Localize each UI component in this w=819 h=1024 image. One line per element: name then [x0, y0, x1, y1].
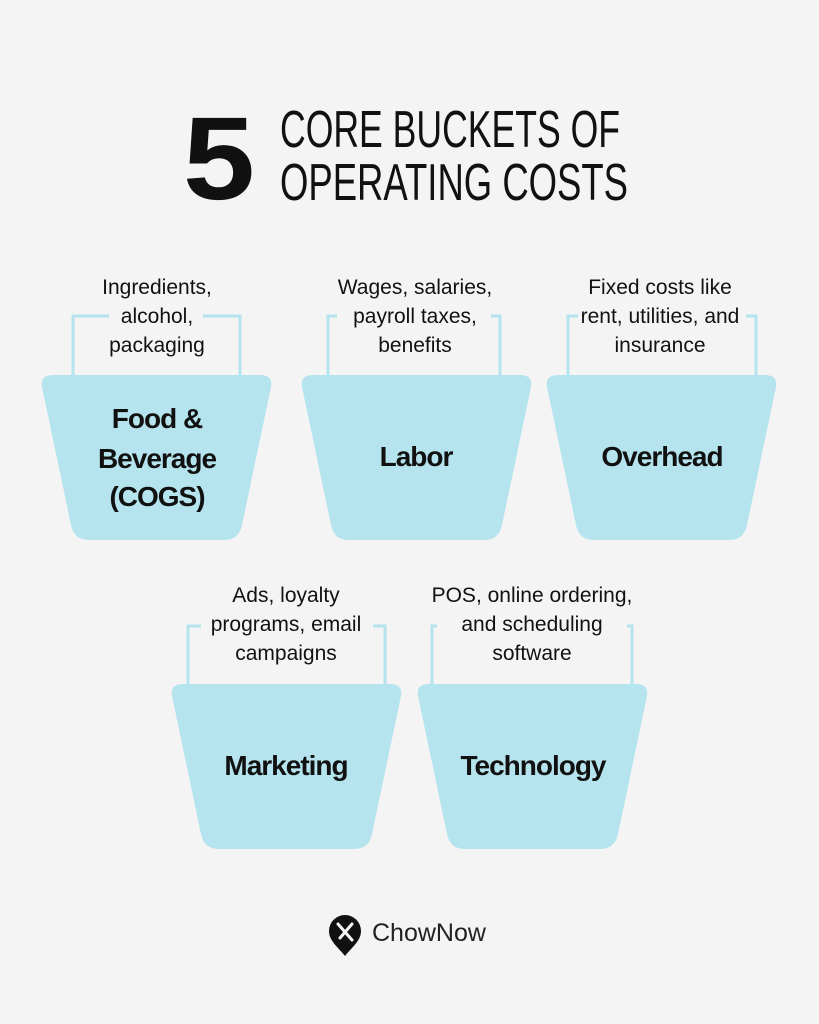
bucket: marketing: Marketing [224, 750, 348, 781]
bucket: food & beverage: Food & [112, 403, 203, 434]
bucket: labor: Wages, salaries, [338, 276, 492, 299]
bucket: marketing: campaigns [235, 642, 337, 665]
bucket: overhead [547, 276, 776, 540]
bucket: food & beverage [42, 276, 271, 540]
title: CORE BUCKETS OF [280, 101, 620, 159]
bucket: technology: POS, online ordering, [432, 584, 632, 607]
bucket: food & beverage: (COGS) [109, 481, 205, 512]
bucket: marketing [172, 584, 401, 849]
bucket: labor [302, 276, 531, 540]
title: 5 [183, 93, 255, 225]
logo: ChowNow: ChowNow [372, 919, 487, 947]
bucket: food & beverage: Ingredients, [102, 276, 212, 299]
bucket: food & beverage: alcohol, [121, 305, 193, 328]
bucket: technology: Technology [460, 750, 607, 781]
title: OPERATING COSTS [280, 154, 628, 212]
bucket: marketing: Ads, loyalty [232, 584, 340, 607]
bucket: labor: payroll taxes, [353, 305, 477, 328]
logo: ChowNow [329, 915, 487, 956]
bucket: food & beverage: Beverage [98, 443, 216, 474]
bucket: technology: software [492, 642, 572, 665]
bucket: overhead: Overhead [601, 441, 723, 472]
bucket: marketing: programs, email [211, 613, 361, 636]
bucket: technology: and scheduling [461, 613, 603, 636]
bucket: technology [418, 584, 647, 849]
bucket: labor: benefits [378, 334, 452, 357]
title [183, 93, 628, 225]
bucket: overhead: rent, utilities, and [581, 305, 739, 328]
bucket: overhead: insurance [614, 334, 706, 357]
bucket: food & beverage: packaging [109, 334, 205, 357]
bucket: overhead: Fixed costs like [588, 276, 732, 299]
bucket: labor: Labor [380, 441, 453, 472]
